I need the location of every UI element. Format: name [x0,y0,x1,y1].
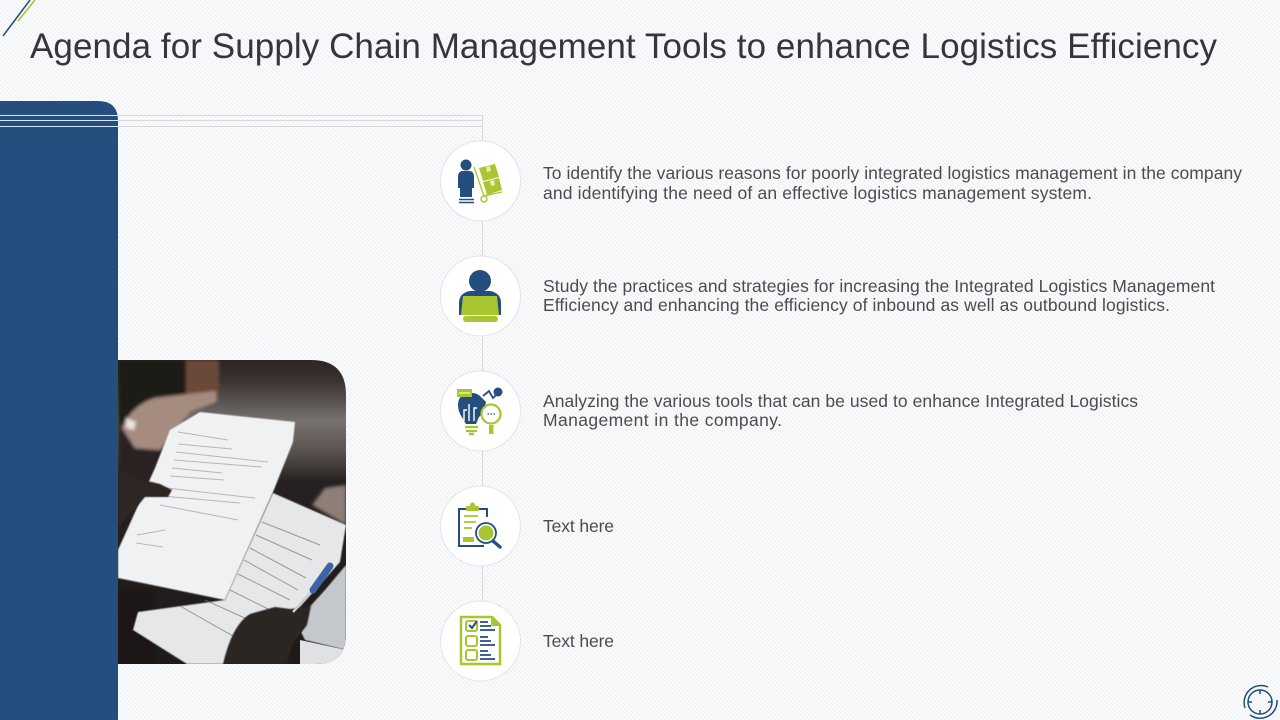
circle badge 3 [440,371,520,451]
light table corner [300,640,346,664]
circle badge 5 [440,601,520,681]
pen [293,566,330,612]
text block 1 [543,163,1242,203]
icon: person with hand truck [458,160,502,202]
title: Agenda for Supply Chain Management Tools to enhance Logistics Efficiency [30,27,1218,66]
blue side panel [0,101,118,720]
text block 3: Management in the company. [543,410,782,430]
text block 1: and identifying the need of an effective logistics management system. [543,183,1092,203]
agenda item 5 [440,601,614,681]
agenda item 1 [440,141,1242,221]
corner accent lines [3,0,35,36]
text block 3: Analyzing the various tools that can be used to enhance Integrated Logistics [543,391,1138,411]
text block 2: Study the practices and strategies for increasing the Integrated Logistics Management [543,276,1215,296]
circle badge 1 [440,141,520,221]
circle badge 4 [440,486,520,566]
icon: person at laptop [459,270,501,322]
printed lines on lower document [180,522,320,640]
upper document [118,412,295,600]
text block 4: Text here [543,516,614,536]
agenda item 3 [440,371,1138,451]
text block 5: Text here [543,631,614,651]
text block 1: To identify the various reasons for poorly integrated logistics management in the company [543,163,1242,183]
agenda item 4 [440,486,614,566]
text block 3 [543,391,1138,430]
vertical timeline connector [482,115,484,640]
icon: checklist document [461,617,500,664]
text block 2: Efficiency and enhancing the efficiency of inbound as well as outbound logistics. [543,295,1170,315]
laptop [296,565,346,650]
agenda item 2 [440,256,1215,336]
icon: analytics bulb and magnifier [457,388,502,434]
icon: circular navigation arrows [1244,686,1277,718]
lower document [133,493,346,664]
triple guide lines [0,116,483,126]
printed lines on upper document [136,432,268,547]
text block 2 [543,276,1215,315]
icon: clipboard with magnifier [459,502,500,547]
photo: hands holding documents [118,360,346,664]
circle badge 2 [440,256,520,336]
holding hands [118,470,311,664]
